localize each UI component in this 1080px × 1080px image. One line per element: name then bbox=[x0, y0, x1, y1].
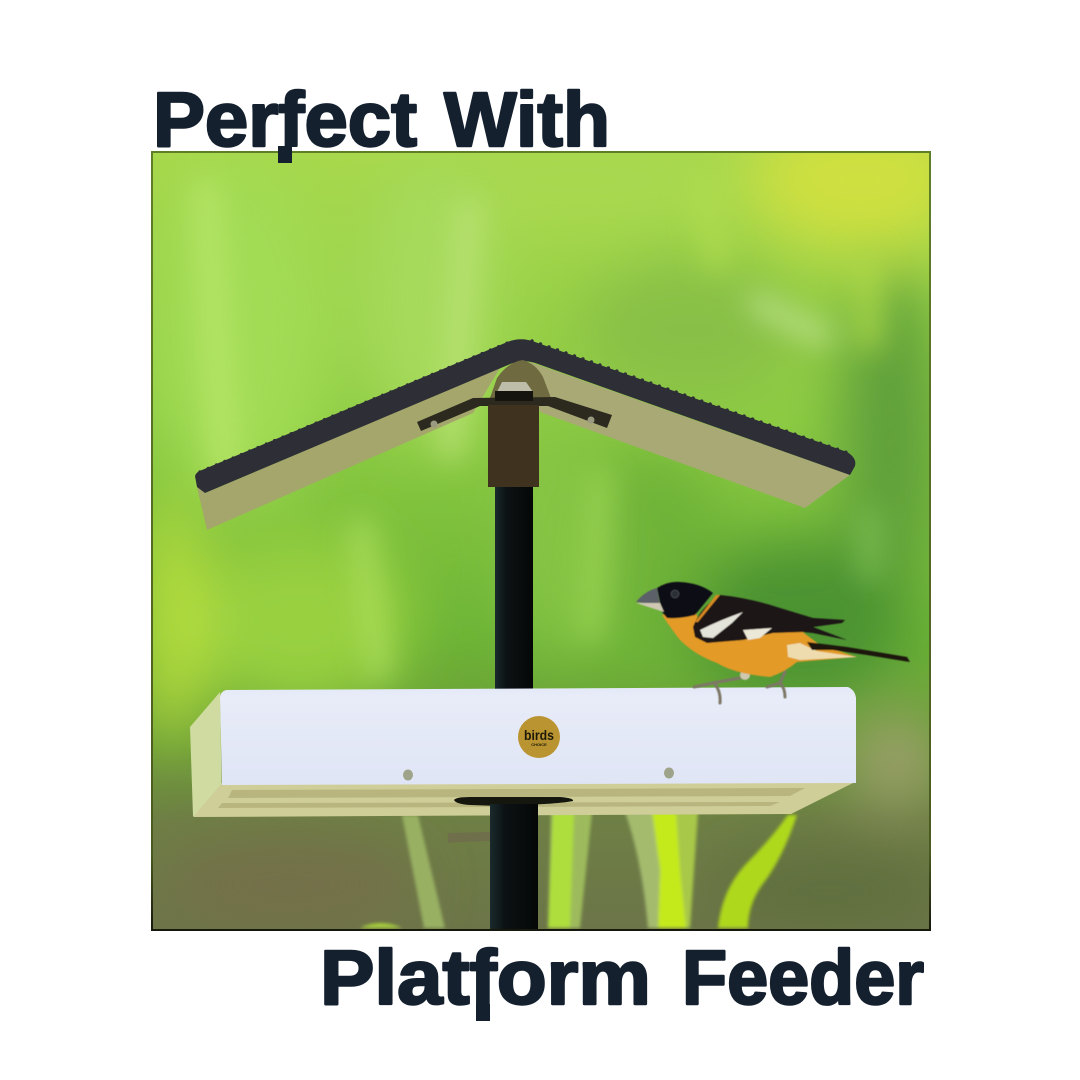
bird belly bbox=[662, 610, 857, 677]
bird legs bbox=[694, 672, 785, 703]
bird eye bbox=[671, 590, 679, 598]
title: Perfect With: With bbox=[444, 77, 610, 163]
lower pole flange bbox=[448, 797, 573, 930]
bird head bbox=[657, 582, 713, 618]
pole upper section bbox=[495, 480, 533, 690]
roof centre bracket bbox=[490, 360, 551, 398]
foreground leaves bbox=[360, 812, 797, 928]
mounting arms bbox=[417, 397, 612, 431]
roof bbox=[195, 339, 855, 530]
bird: black-headed grosbeak bbox=[636, 582, 910, 703]
photo frame bbox=[151, 151, 931, 931]
roof dark top edge bbox=[195, 339, 855, 493]
title: Perfect With: Perfect bbox=[153, 77, 417, 163]
birds badge: birds bbox=[524, 727, 554, 743]
birds badge bbox=[518, 716, 560, 758]
pole collar bbox=[495, 391, 533, 401]
title: Platform Feeder: Platform bbox=[320, 935, 651, 1021]
bird collar bbox=[695, 595, 720, 622]
roof underside panels bbox=[197, 368, 500, 530]
tray left side bbox=[190, 692, 222, 816]
bird wing bbox=[693, 595, 847, 643]
bird thigh bbox=[740, 670, 750, 680]
bird beak bbox=[636, 588, 660, 605]
birds badge: CHOICE bbox=[531, 742, 547, 747]
title: Platform Feeder bbox=[320, 935, 924, 1021]
title: Perfect With bbox=[153, 77, 610, 163]
title: Platform Feeder: Feeder bbox=[682, 935, 924, 1021]
tray front face bbox=[220, 687, 856, 785]
tray screws bbox=[403, 770, 413, 780]
blurred green background bbox=[153, 153, 929, 929]
panel: feeder photograph bbox=[151, 151, 931, 931]
bird tail bbox=[807, 642, 910, 662]
feeder tray bbox=[190, 687, 856, 817]
tray underside bbox=[193, 782, 855, 817]
